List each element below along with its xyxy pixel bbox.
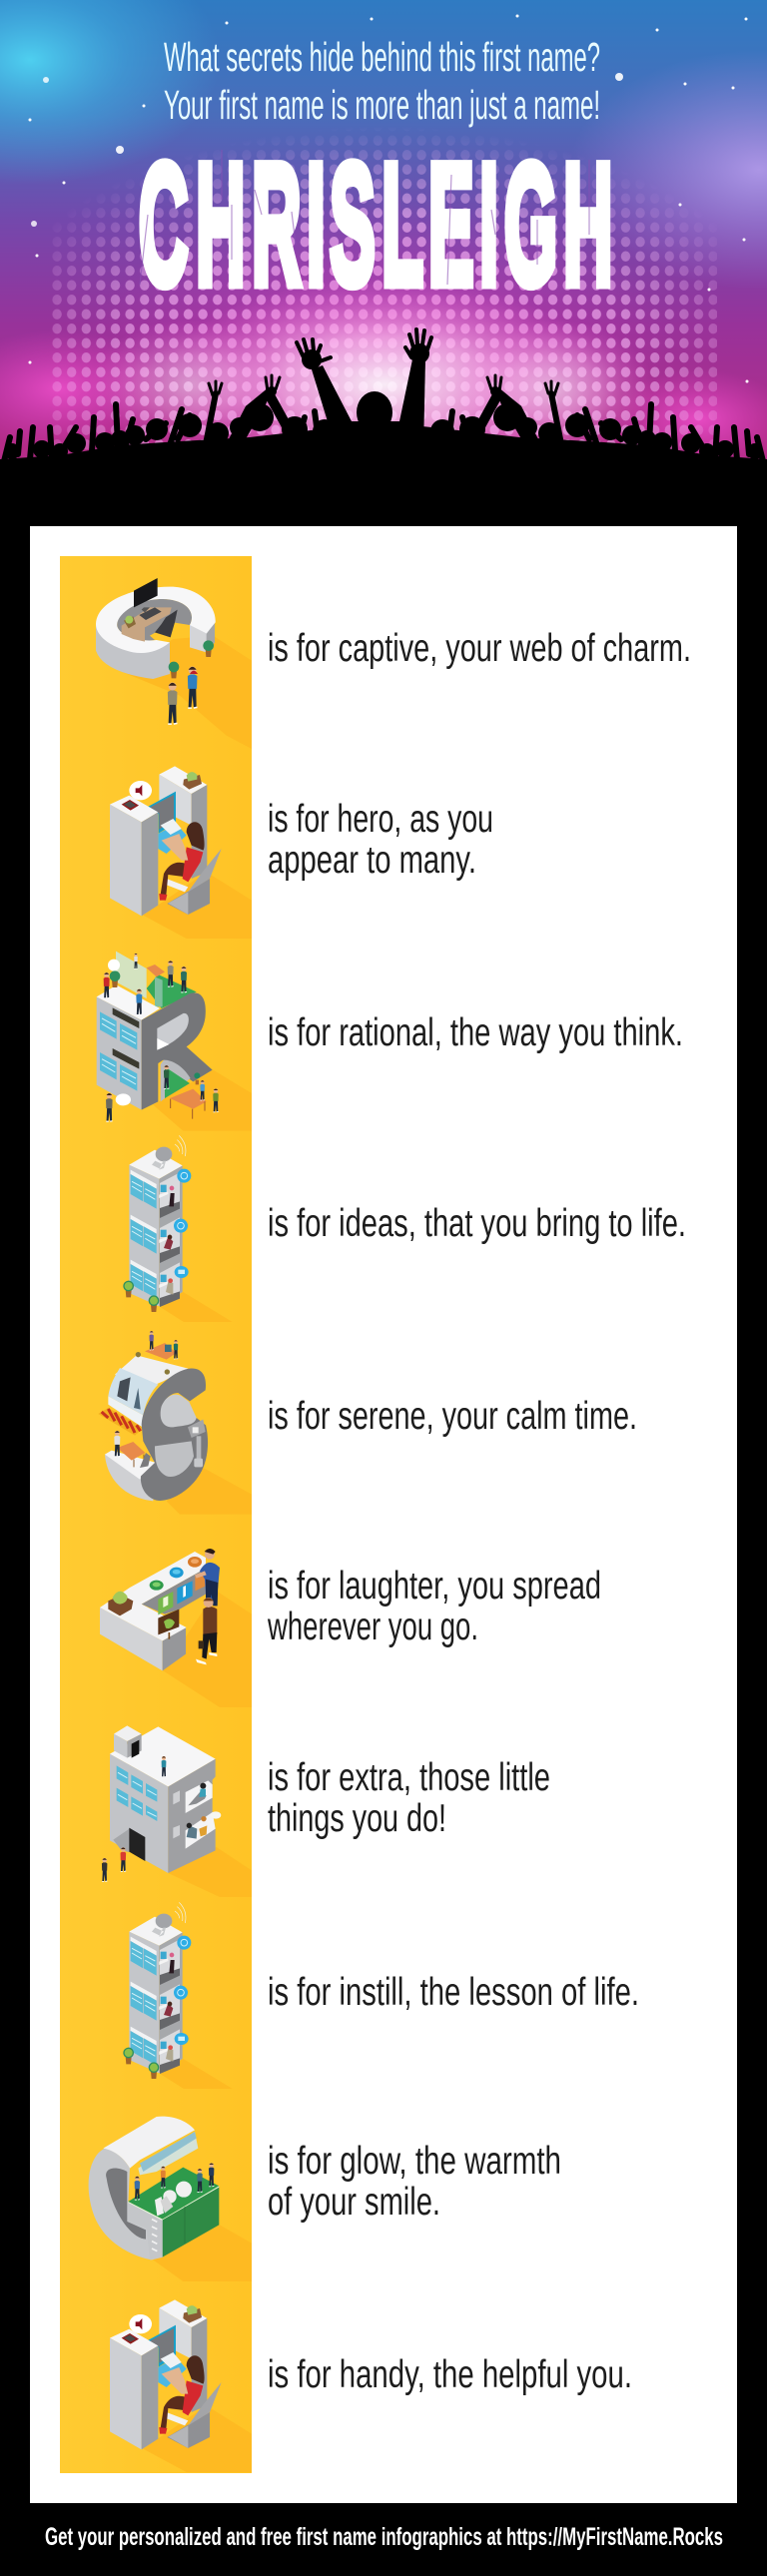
crowd silhouette	[0, 329, 767, 529]
yellow illustration column	[60, 556, 252, 2473]
main white panel	[30, 526, 737, 2503]
row 2 text: is for hero, as you	[268, 798, 493, 841]
icon: letter E building	[102, 1725, 252, 1897]
icon: letter C reception desk	[96, 578, 252, 749]
tagline	[164, 34, 600, 128]
row 6 text: is for laughter, you spread	[268, 1565, 601, 1608]
row 7 text: things you do!	[268, 1797, 446, 1840]
row 7 text: is for extra, those little	[268, 1756, 550, 1799]
icon: letter G building	[89, 2117, 252, 2281]
row 7 text	[268, 1756, 550, 1840]
row 10 text: is for handy, the helpful you.	[268, 2353, 632, 2396]
row 8 text: is for instill, the lesson of life.	[268, 1971, 639, 2014]
row 6 text	[267, 1565, 601, 1648]
icon: letter L recycling station	[100, 1549, 252, 1707]
icon: letter H workstation repeat	[110, 2299, 252, 2472]
row 5 text: is for serene, your calm time.	[268, 1395, 637, 1438]
icon: letter S shop	[98, 1331, 252, 1515]
row 9 text: of your smile.	[268, 2181, 440, 2224]
row 2 text: appear to many.	[268, 839, 476, 882]
name title: CHRISLEIGH	[139, 128, 613, 321]
row 6 text: wherever you go.	[267, 1606, 478, 1648]
illustrations	[89, 578, 252, 2472]
icon: letter H workstation	[110, 766, 252, 939]
icon: letter I tower	[123, 1135, 233, 1322]
icon: letter I tower repeat	[123, 1902, 233, 2089]
row 2 text	[268, 798, 493, 882]
row 9 text	[268, 2140, 561, 2224]
icon: letter R office	[97, 952, 252, 1131]
header: concert background	[0, 0, 767, 459]
row 9 text: is for glow, the warmth	[268, 2140, 561, 2183]
